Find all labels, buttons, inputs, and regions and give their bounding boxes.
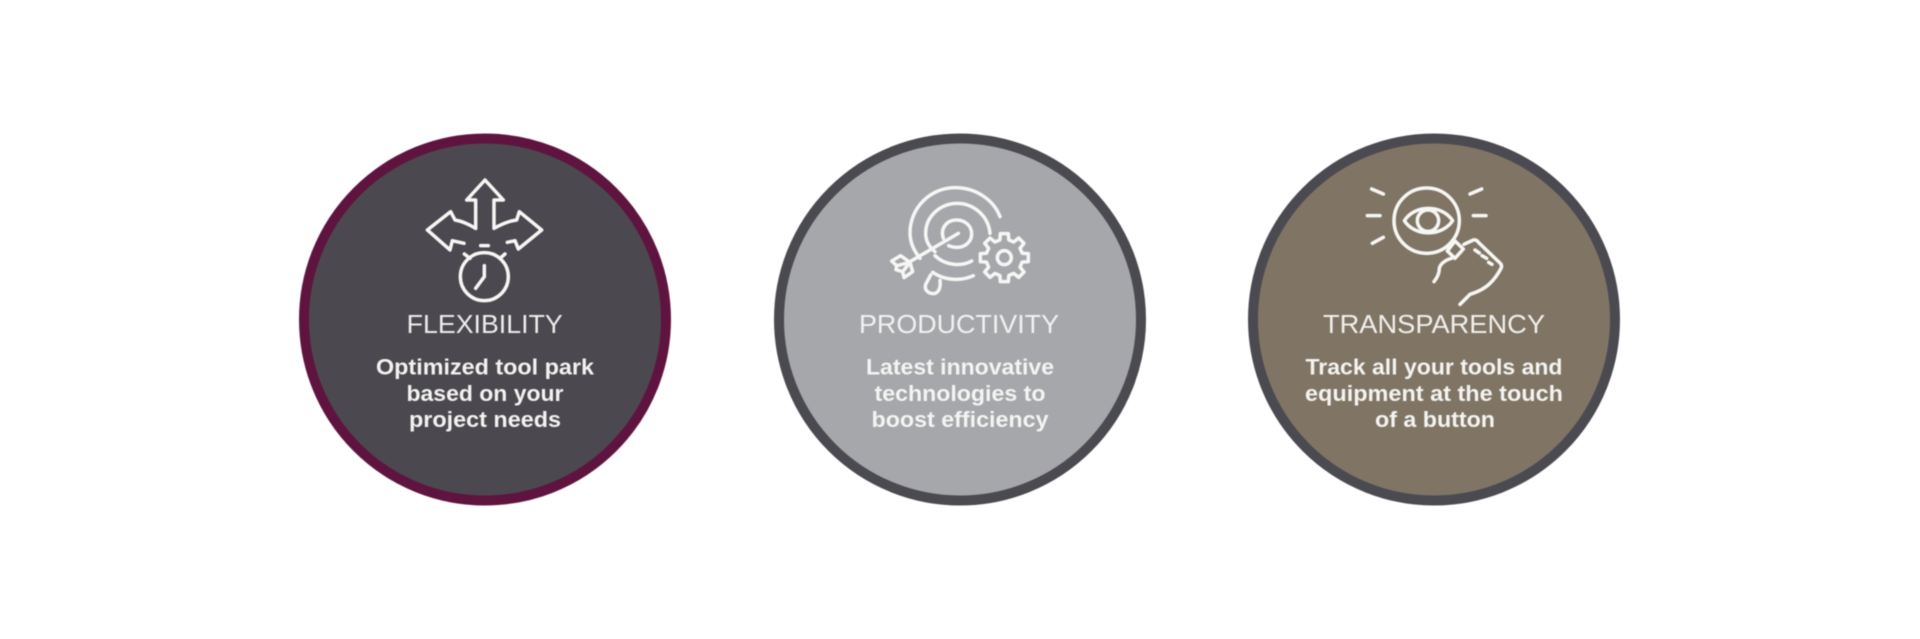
description: transparency: equipment at the touch <box>1305 381 1563 406</box>
circle badge: flexibility <box>304 138 666 500</box>
title: flexibility: FLEXIBILITY <box>407 309 563 339</box>
description: transparency <box>1305 354 1563 432</box>
description: productivity: Latest innovative <box>866 354 1054 380</box>
description: flexibility <box>376 354 595 432</box>
description: productivity <box>866 354 1054 432</box>
icon: target with arrow and gear <box>892 188 1028 294</box>
title: productivity: PRODUCTIVITY <box>859 309 1059 339</box>
circle badge: transparency <box>1253 138 1615 500</box>
panel: flexibility <box>304 138 666 500</box>
icon: branching arrows with stopwatch <box>427 180 542 301</box>
circle badge: productivity <box>779 138 1141 500</box>
description: productivity: boost efficiency <box>872 407 1049 432</box>
panel: transparency <box>1253 138 1615 500</box>
icon: hand holding magnifier with eye <box>1367 188 1502 304</box>
title: transparency: TRANSPARENCY <box>1323 309 1545 339</box>
panel: productivity <box>779 138 1141 500</box>
description: flexibility: Optimized tool park <box>376 354 595 380</box>
description: transparency: Track all your tools and <box>1306 354 1562 380</box>
description: flexibility: based on your <box>406 381 564 406</box>
description: productivity: technologies to <box>874 381 1046 406</box>
description: transparency: of a button <box>1375 407 1495 432</box>
description: flexibility: project needs <box>409 407 561 432</box>
